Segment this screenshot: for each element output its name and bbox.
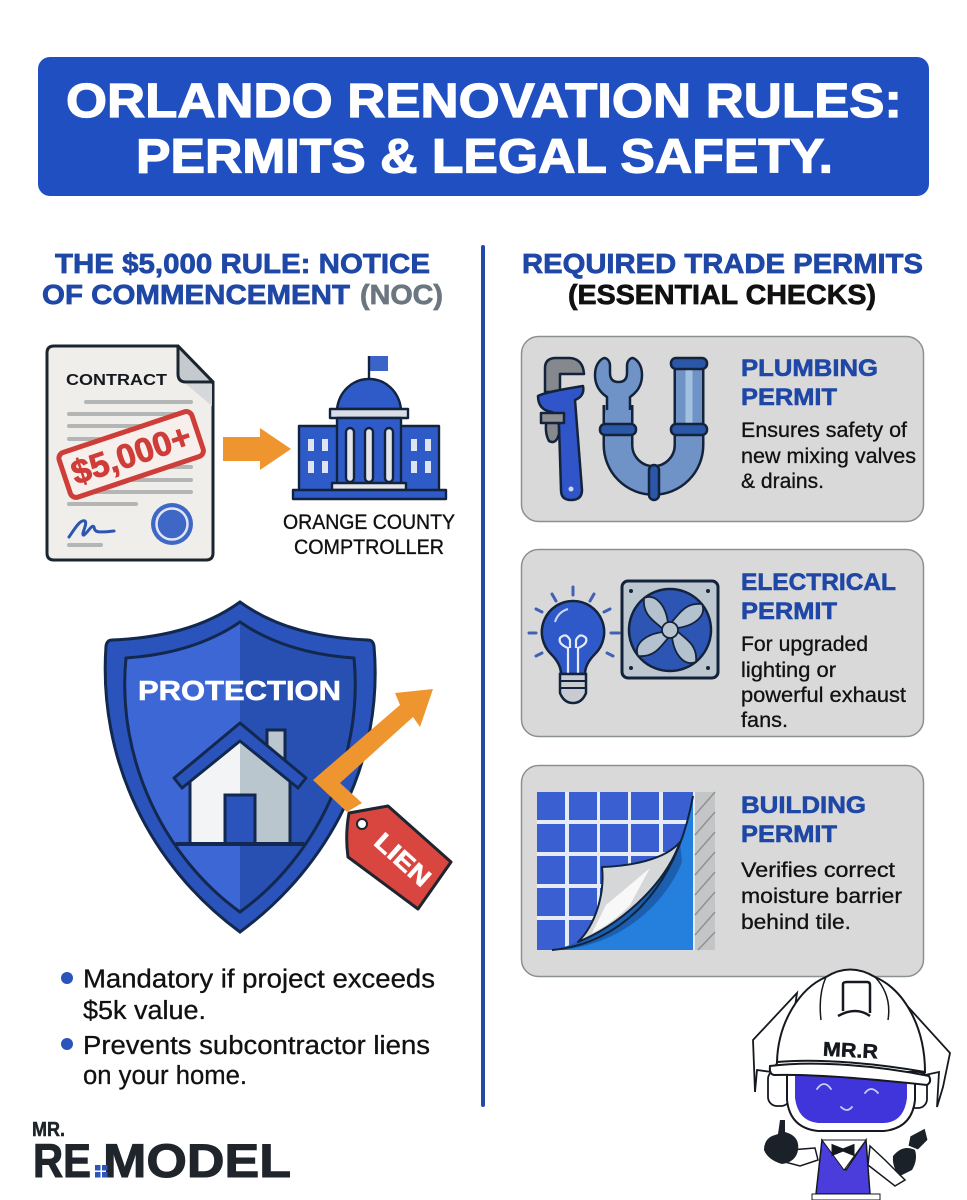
robot body <box>812 1140 880 1200</box>
icon: house <box>174 723 306 844</box>
panel: building permit <box>522 766 924 976</box>
bullet: prevents liens: Prevents subcontractor liens <box>83 1032 430 1060</box>
bullet: prevents liens <box>61 1032 430 1090</box>
right heading: (ESSENTIAL CHECKS) <box>568 279 876 310</box>
right heading: REQUIRED TRADE PERMITS <box>522 248 923 279</box>
icon: pipe wrench <box>538 358 584 500</box>
mascot: Mr. R robot <box>753 970 950 1200</box>
plumbing text: PERMIT <box>741 384 837 411</box>
plumbing text: new mixing valves <box>741 444 916 468</box>
electrical text: ELECTRICAL <box>741 569 896 596</box>
electrical text: PERMIT <box>741 598 837 625</box>
comptroller label: ORANGE COUNTY <box>283 511 455 534</box>
logo: Mr. Remodel: MR. <box>32 1119 65 1141</box>
robot arms <box>764 1120 928 1186</box>
icon: courthouse <box>293 356 446 499</box>
seal <box>151 503 193 545</box>
icon: spanner and U-pipe <box>595 358 707 500</box>
bullet list <box>61 966 435 1090</box>
building text: BUILDING <box>741 792 866 819</box>
left heading: OF COMMENCEMENT <box>42 279 350 310</box>
face screen <box>795 1075 907 1123</box>
building text: moisture barrier <box>741 884 902 908</box>
hard hat <box>777 970 925 1072</box>
panel: plumbing permit <box>522 336 924 522</box>
electrical text: fans. <box>741 708 788 732</box>
title banner: PERMITS & LEGAL SAFETY. <box>136 130 833 184</box>
headset straps <box>753 987 950 1108</box>
logo: Mr. Remodel: MODEL <box>103 1134 291 1187</box>
left heading <box>42 248 443 310</box>
helmet label: MR.R <box>822 1039 879 1063</box>
robot head <box>787 1072 915 1131</box>
plumbing text: PLUMBING <box>741 355 878 382</box>
electrical text: For upgraded <box>741 632 868 656</box>
panel: electrical permit <box>522 550 924 736</box>
electrical text: lighting or <box>741 658 836 682</box>
plumbing text: Ensures safety of <box>741 418 907 442</box>
plumbing text: & drains. <box>741 469 824 493</box>
centre divider <box>481 245 485 1107</box>
contract label: CONTRACT <box>66 372 167 389</box>
shield label: PROTECTION <box>138 675 341 706</box>
electrical text <box>741 569 906 732</box>
logo: Mr. Remodel: RE <box>33 1134 91 1187</box>
comptroller label: COMPTROLLER <box>294 536 444 559</box>
logo window mark <box>95 1165 108 1178</box>
icon: peeling tile <box>537 792 715 950</box>
building text <box>741 792 902 934</box>
title banner: ORLANDO RENOVATION RULES: <box>66 75 902 128</box>
bullet: mandatory: $5k value. <box>83 997 206 1025</box>
title banner <box>38 57 929 196</box>
bullet: mandatory <box>61 966 435 1025</box>
left heading: (NOC) <box>360 279 443 310</box>
electrical text: powerful exhaust <box>741 683 906 707</box>
icon: light bulb <box>529 587 619 703</box>
icon: protection shield <box>105 602 375 932</box>
icon: lien tag: LIEN <box>368 828 436 893</box>
bullet: mandatory: Mandatory if project exceeds <box>83 966 435 994</box>
plumbing text <box>741 355 916 493</box>
right heading <box>522 248 923 310</box>
building text: behind tile. <box>741 910 851 934</box>
icon: exhaust fan <box>622 581 718 678</box>
comptroller label <box>283 511 455 559</box>
icon: contract document <box>47 346 213 560</box>
arrow: contract to comptroller <box>223 428 291 470</box>
building text: Verifies correct <box>741 858 895 882</box>
bullet: prevents liens: on your home. <box>83 1062 247 1090</box>
left heading: THE $5,000 RULE: NOTICE <box>55 248 430 279</box>
arrow: lien deflected <box>313 689 433 812</box>
building text: PERMIT <box>741 821 837 848</box>
icon: lien tag <box>347 806 451 909</box>
logo: Mr. Remodel <box>32 1119 291 1187</box>
stamp: $5,000+: $5,000+ <box>66 417 196 493</box>
